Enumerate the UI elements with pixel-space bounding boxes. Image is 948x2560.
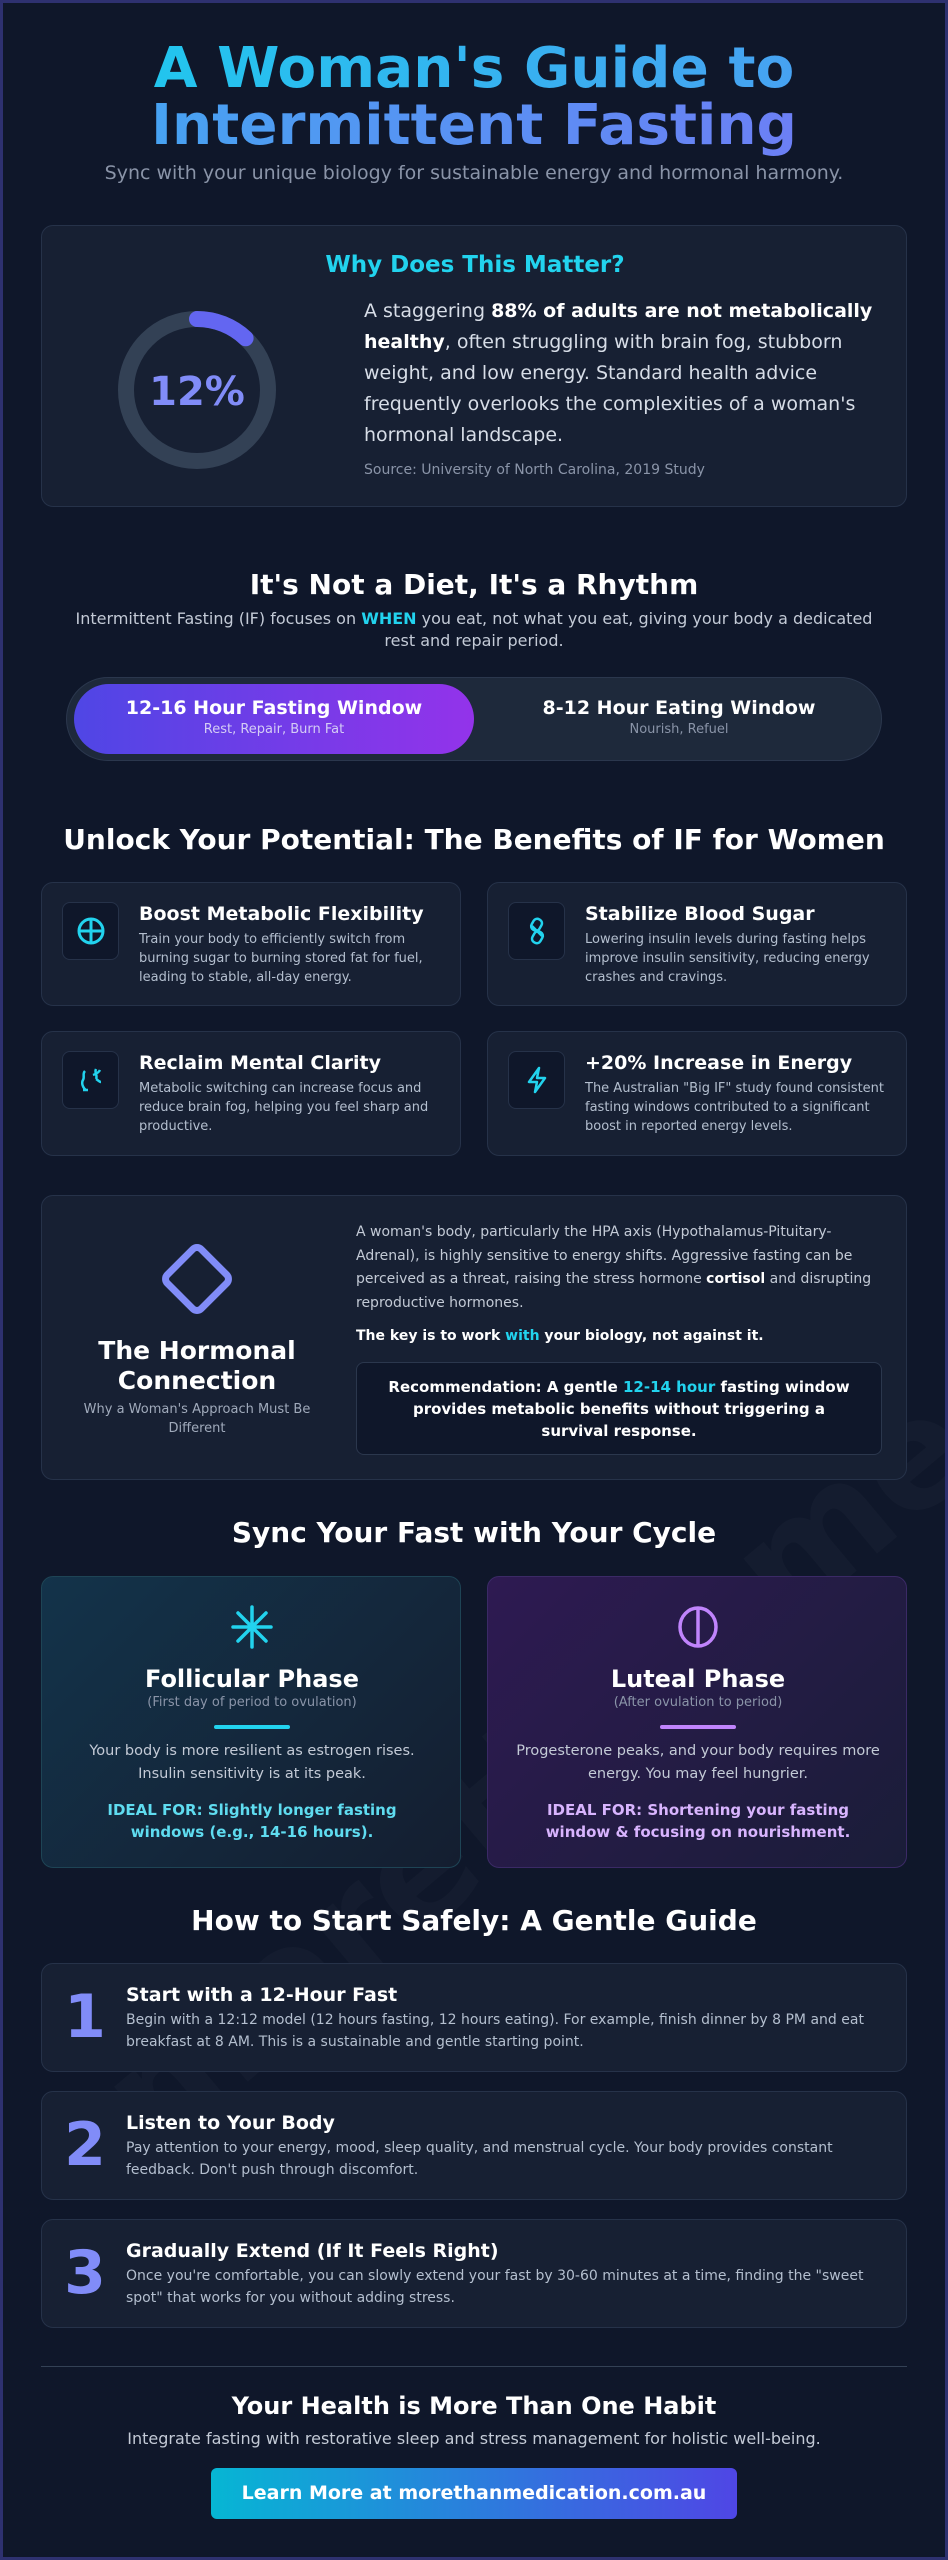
text: ideal for follicular: IDEAL FOR: Slightly longer fasting windows (e.g., 14-16 hours).	[107, 1801, 397, 1841]
chart: 12% ring	[118, 311, 276, 469]
title	[151, 36, 797, 158]
subtitle: why different: Why a Woman's Approach Must Be Different	[84, 1402, 310, 1436]
title: Luteal Phase	[611, 1665, 785, 1693]
heading: rhythm: It's Not a Diet, It's a Rhythm	[250, 568, 698, 601]
icon: brain	[62, 1051, 119, 1109]
panel: benefit energy: The Australian "Big IF" study found consistent fasting windows contributed to a significant boost in reported energy levels.	[585, 1081, 884, 1134]
panel: benefit blood sugar	[487, 882, 907, 1006]
footer heading: Your Health is More Than One Habit	[232, 2392, 716, 2420]
title: Follicular Phase	[145, 1665, 359, 1693]
panel: benefit energy: +20% Increase in Energy	[585, 1052, 852, 1074]
callout: recommendation	[356, 1362, 882, 1455]
panel: follicular phase	[41, 1576, 461, 1868]
icon: chain	[508, 902, 565, 960]
heading: cycle: Sync Your Fast with Your Cycle	[232, 1516, 716, 1549]
icon: globe	[62, 902, 119, 960]
text: follicular description: Your body is more resilient as estrogen rises. Insulin sensitivity is at its peak.	[89, 1743, 415, 1782]
panel: step 2: Pay attention to your energy, mood, sleep quality, and menstrual cycle. Your body provides constant feedback. Don't push through discomfort.	[126, 2140, 833, 2178]
panel: benefit blood sugar: Lowering insulin levels during fasting helps improve insulin sensitivity, reducing energy crashes and cravings.	[585, 932, 870, 985]
heading: benefits: Unlock Your Potential: The Benefits of IF for Women	[63, 823, 885, 856]
panel: benefit blood sugar: Stabilize Blood Sugar	[585, 903, 815, 925]
source: Source: University of North Carolina, 2019 Study	[364, 462, 705, 478]
heading: how to start: How to Start Safely: A Gentle Guide	[191, 1904, 757, 1937]
panel: step 1: Start with a 12-Hour Fast	[126, 1984, 397, 2006]
panel: step 2: Listen to Your Body	[126, 2112, 335, 2134]
callout: recommendation: Recommendation: A gentle 12-14 hour fasting window provides metabolic benefits without triggering a survival response.	[388, 1378, 850, 1440]
panel: benefit metabolic flexibility: Boost Metabolic Flexibility	[139, 903, 424, 925]
panel: step 2	[41, 2091, 907, 2200]
text: luteal description: Progesterone peaks, and your body requires more energy. You may feel hungrier.	[516, 1743, 880, 1782]
panel: why does this matter	[41, 225, 907, 507]
panel: step 3	[41, 2219, 907, 2328]
text: rhythm intro: Intermittent Fasting (IF) focuses on WHEN you eat, not what you eat, giving your body a dedicated rest and repair period.	[76, 609, 872, 650]
panel: benefit mental clarity: Reclaim Mental Clarity	[139, 1052, 381, 1074]
text: key: The key is to work with your biology, not against it.	[356, 1328, 764, 1344]
fasting window	[74, 684, 474, 754]
text: ideal for luteal: IDEAL FOR: Shortening your fasting window & focusing on nourishment.	[546, 1801, 850, 1841]
pill: fasting vs eating windows	[66, 677, 882, 761]
panel: step 3: Gradually Extend (If It Feels Right)	[126, 2240, 499, 2262]
icon: circle line	[678, 1606, 718, 1648]
heading: why: Why Does This Matter?	[325, 252, 625, 278]
text: hormonal explanation: A woman's body, particularly the HPA axis (Hypothalamus-Pituitary-Adrenal), is highly sensitive to energy shifts. Aggressive fasting can be perceived as a threat, raising the stress hormone cortisol and disrupting reproductive hormones.	[356, 1224, 871, 1310]
title: A Woman's Guide to	[154, 36, 794, 101]
button: learn more: Learn More at morethanmedication.com.au	[242, 2482, 706, 2504]
subtitle: Sync with your unique biology for sustainable energy and hormonal harmony.	[105, 162, 843, 184]
eating window	[543, 697, 815, 737]
fasting window: Rest, Repair, Burn Fat	[204, 722, 344, 737]
panel: step 2: 2	[64, 2110, 106, 2180]
chart: 12% ring: 12%	[149, 369, 245, 415]
footer text: Integrate fasting with restorative sleep and stress management for holistic well-being.	[127, 2429, 821, 2448]
panel: luteal phase	[487, 1576, 907, 1868]
button: learn more	[211, 2468, 737, 2519]
heading: hormonal connection: The Hormonal Connection	[98, 1336, 296, 1395]
panel: hormonal connection	[41, 1195, 907, 1480]
icon: lightning	[508, 1051, 565, 1109]
panel: benefit metabolic flexibility: Train your body to efficiently switch from burning sugar to burning stored fat for fuel, leading to stable, all-day energy.	[139, 932, 423, 985]
fasting window: 12-16 Hour Fasting Window	[126, 697, 422, 719]
panel: step 1	[41, 1963, 907, 2072]
text: stat description: A staggering 88% of adults are not metabolically healthy, often struggling with brain fog, stubborn weight, and low energy. Standard health advice frequently overlooks the complexities of a woman's hormonal landscape.	[364, 300, 872, 446]
panel: benefit mental clarity	[41, 1031, 461, 1156]
panel: step 3: Once you're comfortable, you can slowly extend your fast by 30-60 minutes at a time, finding the "sweet spot" that works for you without adding stress.	[126, 2268, 863, 2306]
title: Intermittent Fasting	[151, 93, 797, 158]
eating window: 8-12 Hour Eating Window	[543, 697, 815, 719]
panel: follicular phase: (First day of period to ovulation)	[147, 1695, 357, 1710]
panel: step 1: Begin with a 12:12 model (12 hours fasting, 12 hours eating). For example, finish dinner by 8 PM and eat breakfast at 8 AM. This is a sustainable and gentle starting point.	[126, 2012, 864, 2050]
eating window: Nourish, Refuel	[629, 722, 729, 737]
panel: benefit metabolic flexibility	[41, 882, 461, 1006]
panel: benefit mental clarity: Metabolic switching can increase focus and reduce brain fog, helping you feel sharp and productive.	[139, 1081, 428, 1134]
icon: asterisk	[231, 1605, 273, 1649]
panel: luteal phase: (After ovulation to period)	[614, 1695, 782, 1710]
panel: step 1: 1	[64, 1982, 106, 2052]
panel: step 3: 3	[64, 2238, 106, 2308]
panel: benefit energy	[487, 1031, 907, 1156]
icon: diamond	[162, 1244, 232, 1314]
